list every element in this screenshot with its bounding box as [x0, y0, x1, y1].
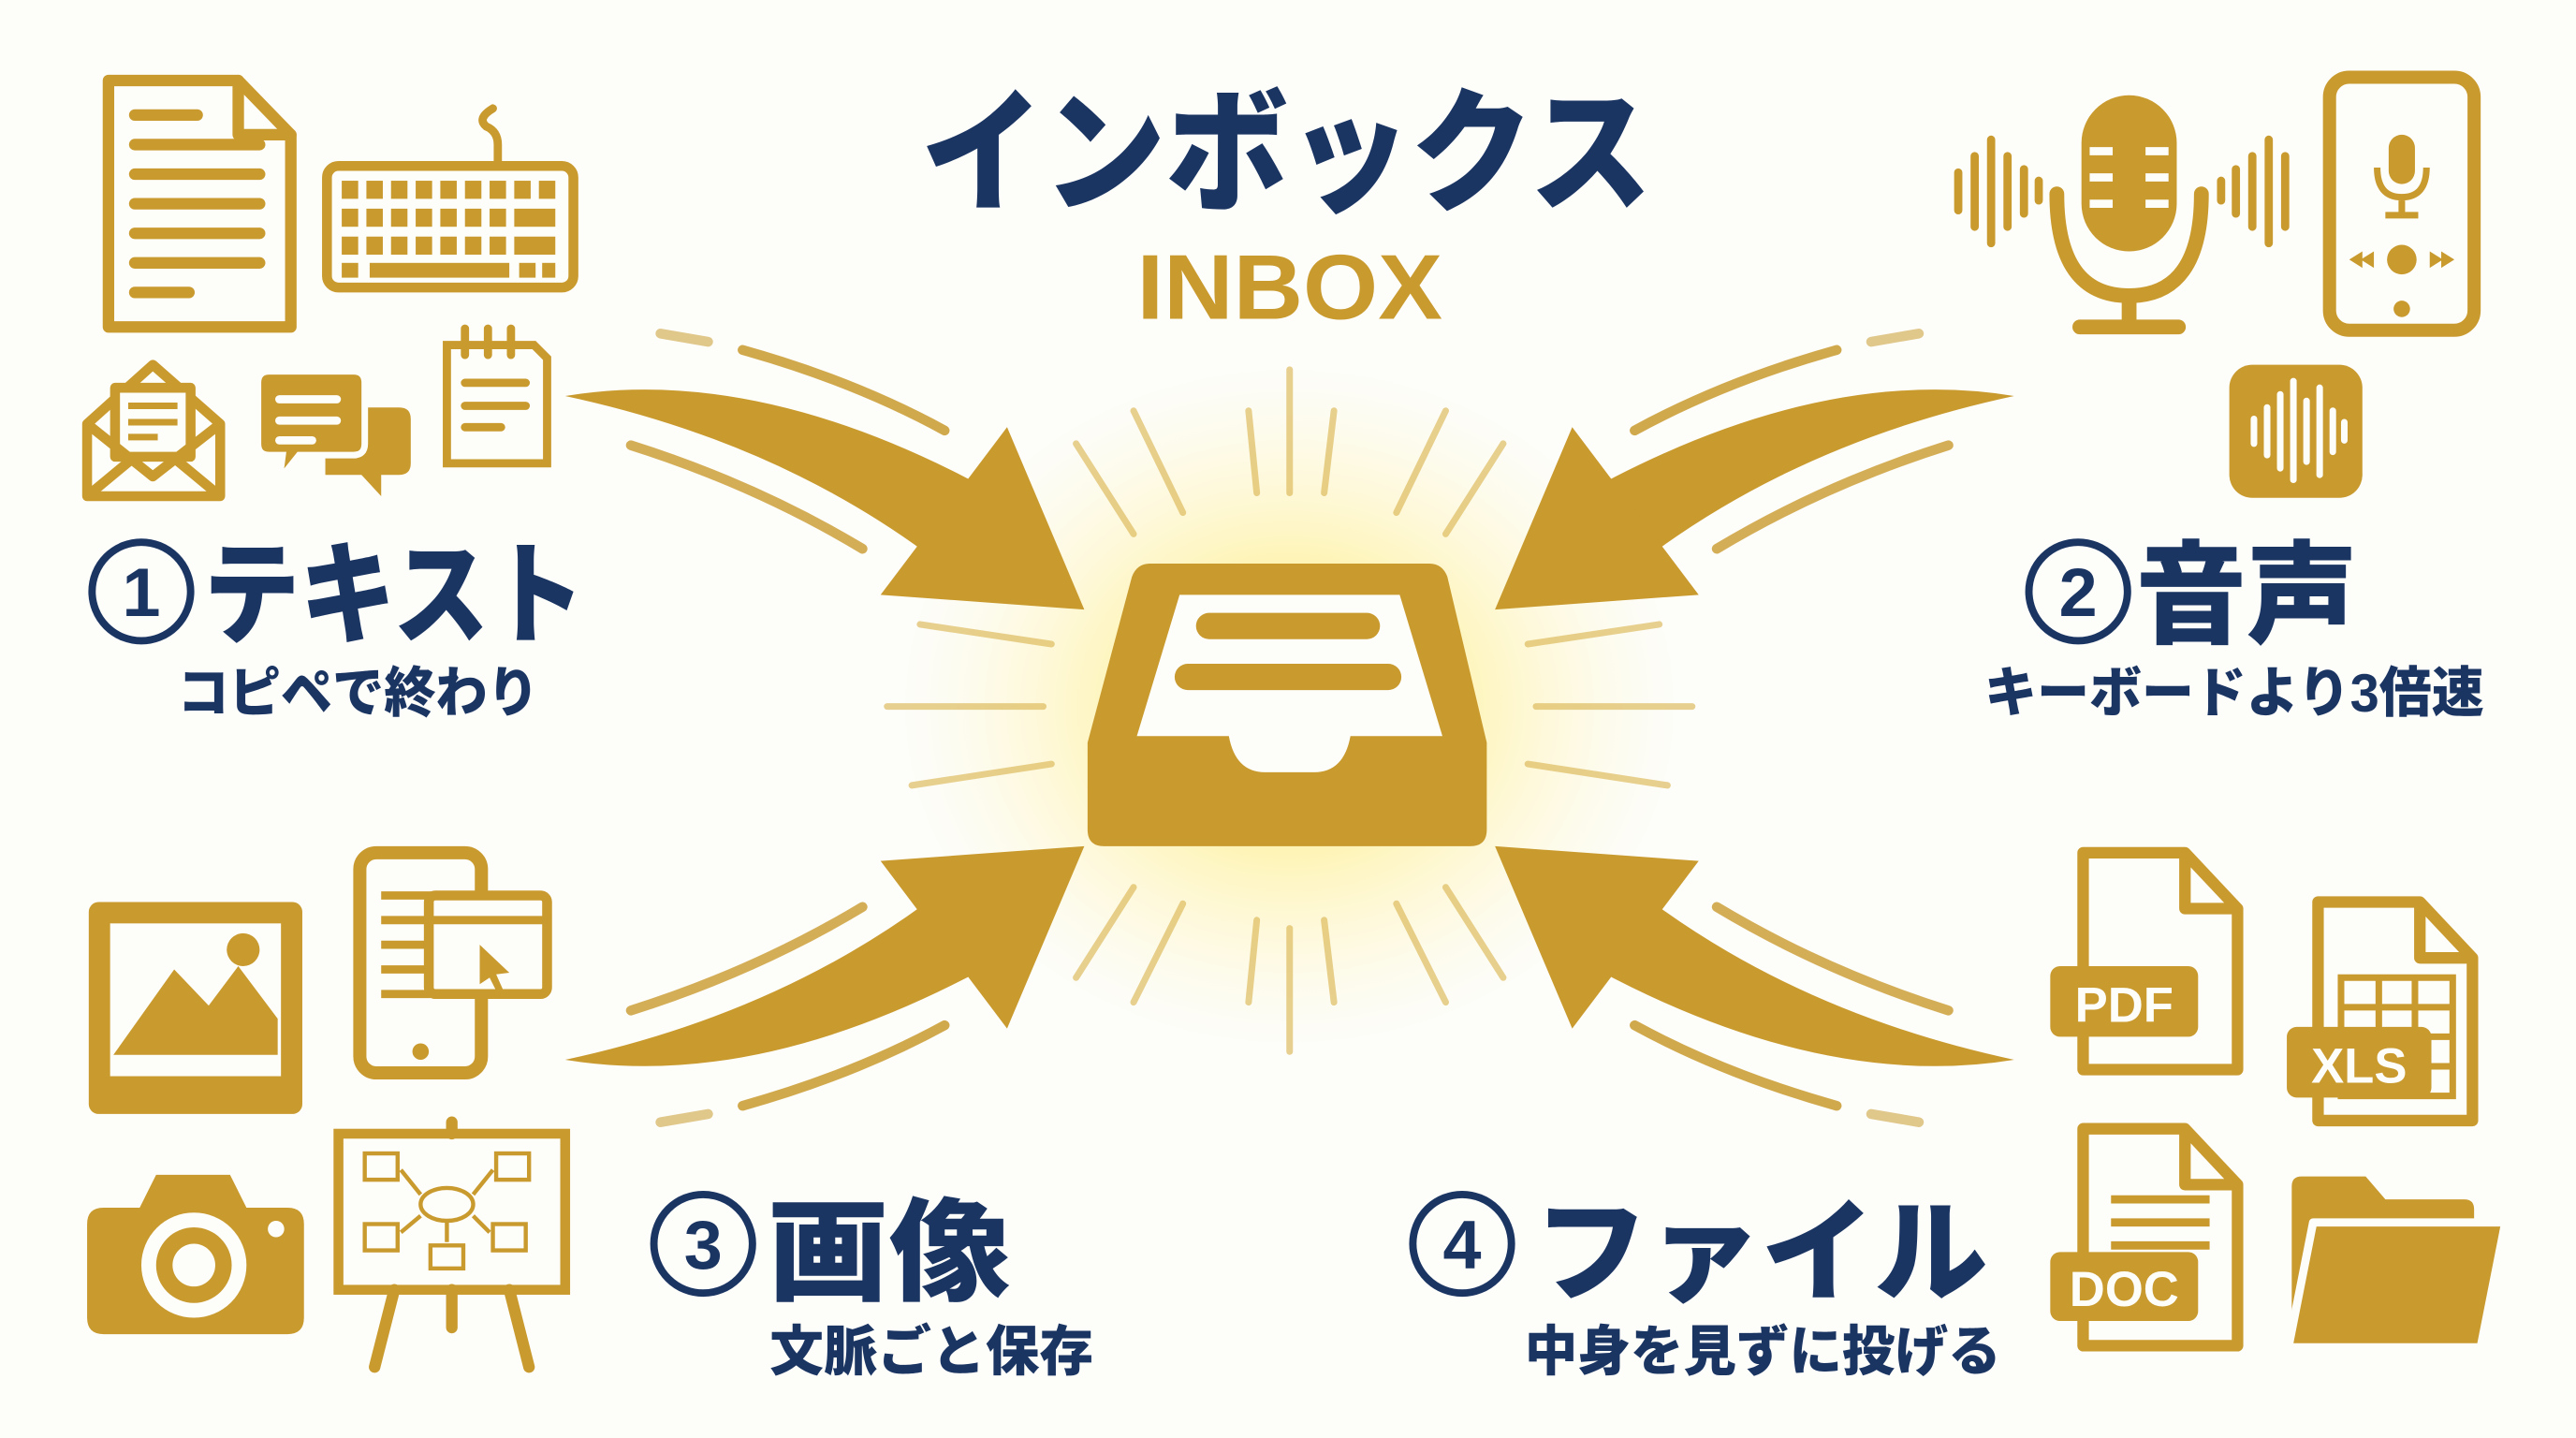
text: save with context: 文脈ごと保存 [769, 1322, 1093, 1383]
heading: ① テキスト: テキスト [204, 534, 585, 658]
icon: PDF file [2050, 853, 2237, 1070]
icon: smartphone recorder [2330, 77, 2474, 330]
heading: ② 音声: 2 [2059, 553, 2098, 631]
icon: keyboard [327, 109, 574, 287]
heading: ② 音声: 音声 [2136, 534, 2358, 658]
heading: ④ ファイル: 4 [1443, 1206, 1482, 1284]
glow behind inbox [896, 361, 1684, 1051]
panel: text (top-left) [87, 81, 585, 724]
heading: ① テキスト [92, 534, 585, 658]
icon: picture [89, 902, 302, 1114]
icon: XLS file [2287, 902, 2472, 1121]
icon: chat bubbles [258, 372, 411, 496]
heading: ① テキスト: 1 [122, 553, 160, 631]
text: toss without looking: 中身を見ずに投げる [1525, 1323, 2001, 1383]
icon: DOC file: DOC [2070, 1262, 2179, 1317]
icon: easel whiteboard [339, 1123, 565, 1367]
panel: voice (top-right) [1958, 77, 2484, 724]
heading: ② 音声 [2029, 534, 2358, 658]
heading: ③ 画像: 画像 [768, 1191, 1010, 1315]
icon: audio app [2230, 365, 2363, 498]
text: copy-paste: コピペで終わり [178, 664, 539, 724]
subtitle: INBOX: INBOX [1137, 235, 1442, 338]
heading: ③ 画像: 3 [684, 1206, 723, 1284]
panel: files (bottom-right) [1412, 853, 2505, 1383]
icon: notepad [446, 329, 547, 463]
icon: XLS file: XLS [2311, 1039, 2407, 1094]
text: 3x faster: キーボードより3倍速 [1984, 664, 2484, 724]
rays around inbox [887, 370, 1692, 1051]
icon: DOC file [2050, 1129, 2237, 1345]
icon: camera [87, 1175, 304, 1334]
arrow: top-right [1495, 333, 2014, 609]
title: インボックス [921, 80, 1652, 229]
arrow: bottom-left [565, 846, 1084, 1123]
icon: envelope [87, 365, 220, 496]
panel: image (bottom-left) [87, 853, 1093, 1383]
icon: folder [2289, 1177, 2505, 1347]
icon: microphone with sound waves [1958, 95, 2285, 327]
heading: ③ 画像 [654, 1191, 1010, 1315]
heading: ④ ファイル: ファイル [1534, 1191, 1988, 1315]
icon: inbox tray [1088, 564, 1486, 846]
arrow: bottom-right [1495, 846, 2014, 1123]
icon: phone with window [359, 853, 547, 1073]
icon: PDF file: PDF [2075, 978, 2174, 1034]
icon: document [109, 81, 291, 327]
arrow: top-left [565, 333, 1084, 609]
